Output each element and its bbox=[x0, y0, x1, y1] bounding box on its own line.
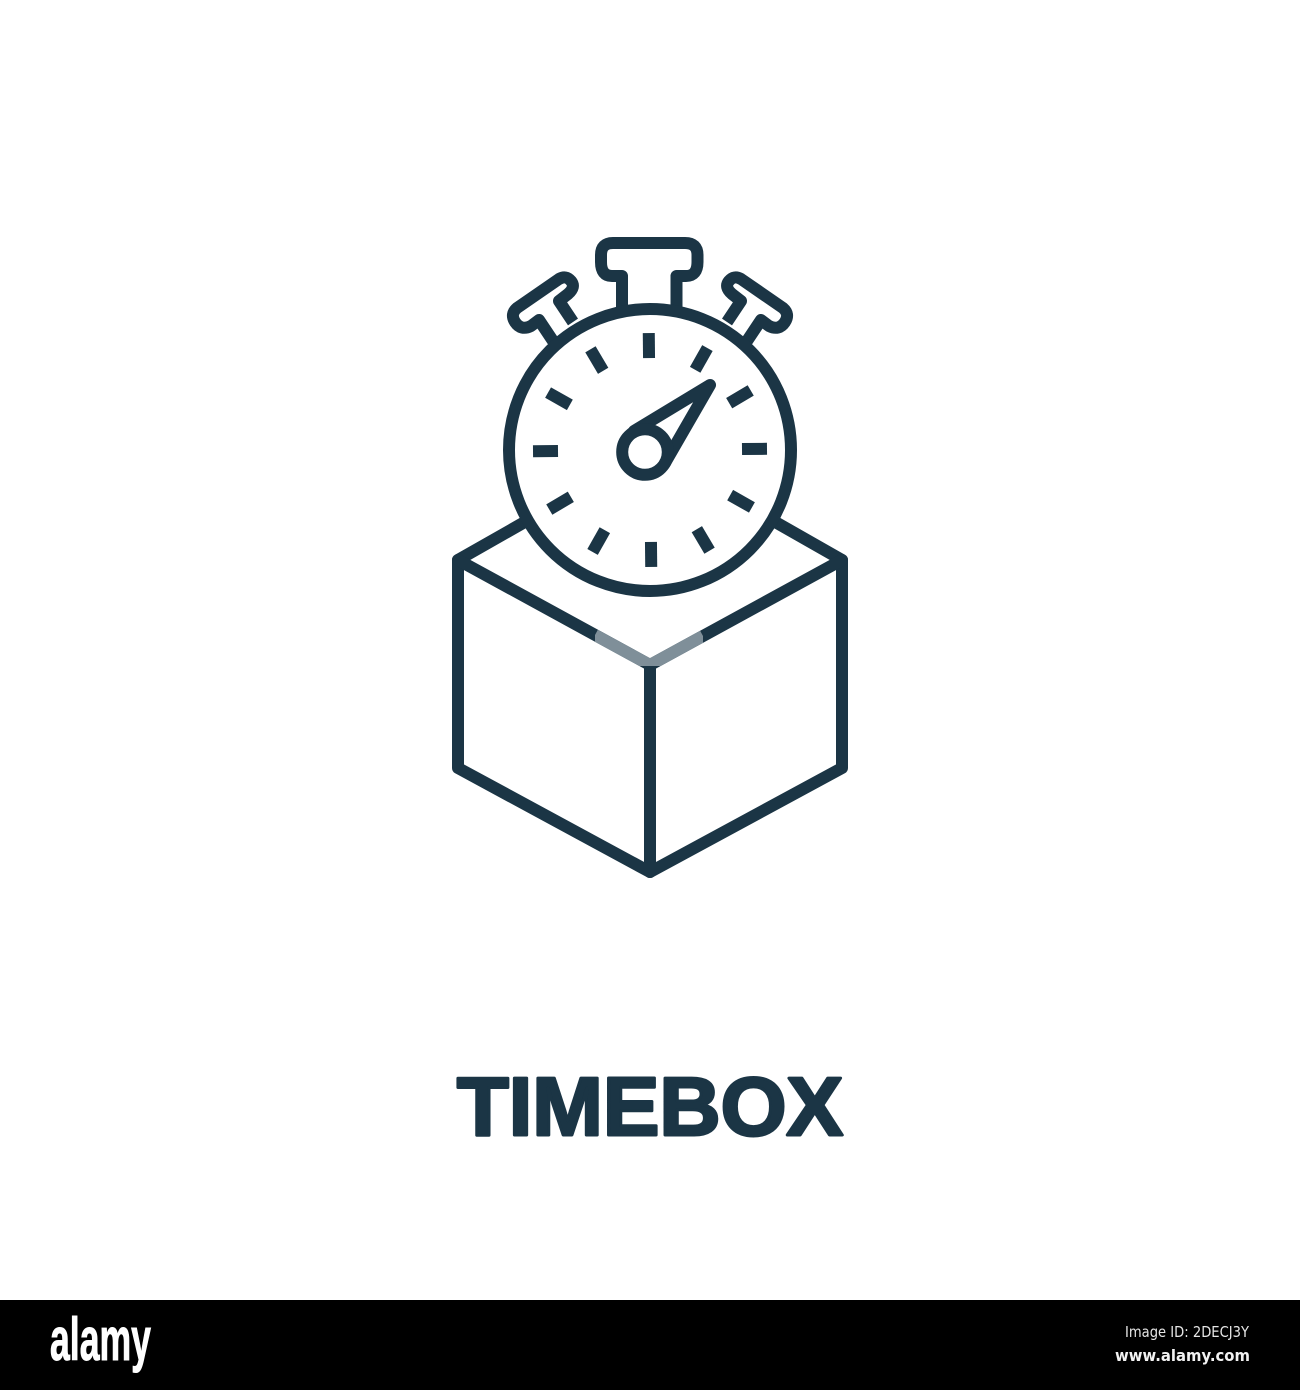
stopwatch right button bbox=[727, 277, 787, 341]
footer image id: Image ID: 2DECJ3Y bbox=[1125, 1323, 1250, 1341]
dial tick marks bbox=[532, 332, 768, 568]
stopwatch dial bbox=[509, 309, 791, 591]
icon: timebox stopwatch on a cube bbox=[458, 243, 842, 872]
stopwatch left button bbox=[513, 277, 573, 341]
stopwatch top button bbox=[601, 243, 698, 310]
title: TIMEBOX: TIMEBOX bbox=[457, 1060, 843, 1153]
footer website: www.alamy.com bbox=[1115, 1346, 1250, 1365]
icon: stopwatch bbox=[509, 243, 791, 591]
stopwatch hand bbox=[622, 385, 710, 475]
footer bar bbox=[0, 1300, 1300, 1390]
icon: cube bbox=[458, 523, 842, 872]
footer logo: alamy: alamy bbox=[50, 1306, 151, 1373]
